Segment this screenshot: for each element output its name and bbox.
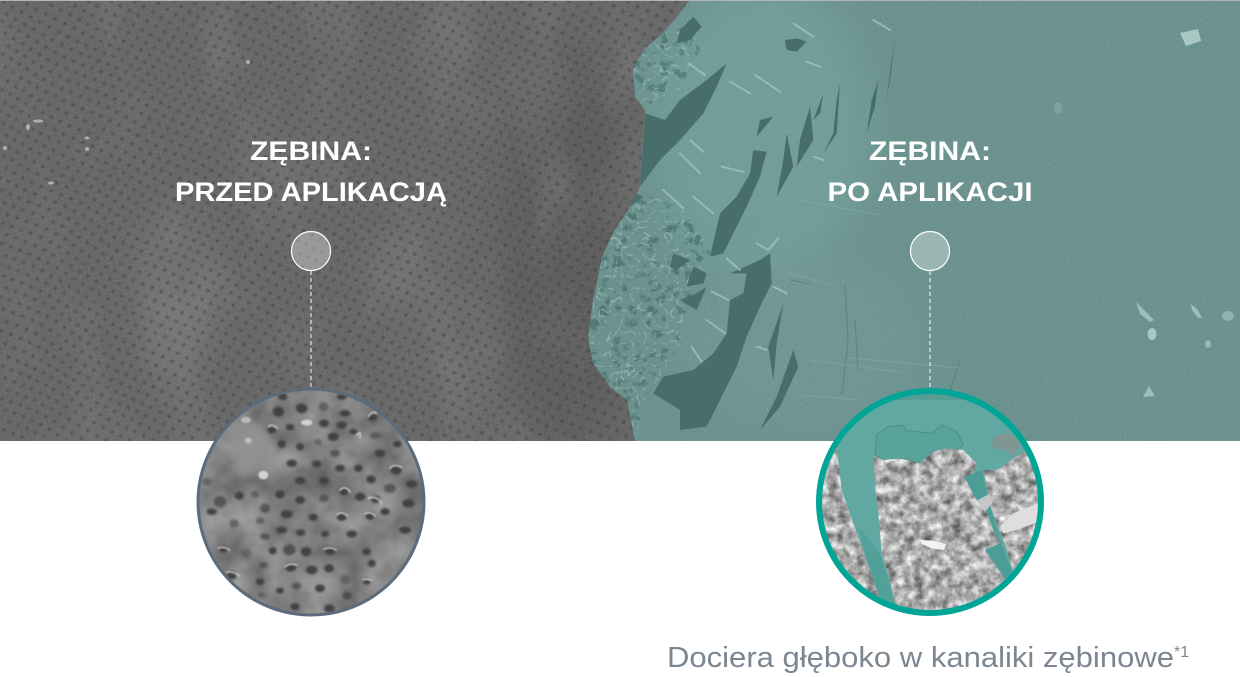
caption: Dociera głęboko w kanaliki zębinowe: [667, 642, 1174, 674]
marker: before application pin: [292, 232, 330, 390]
teal channels: [965, 470, 1013, 578]
light ridges on the fracture: [663, 20, 890, 362]
heading: before application: ZĘBINA:: [250, 136, 372, 166]
heading: after application line two: PO APLIKACJI: [828, 177, 1032, 207]
upper mesh: [633, 27, 700, 104]
photo: treated dentin tinted teal: [580, 0, 1240, 441]
panel: dentin photo before and after: [0, 0, 1240, 450]
top edge highlight: [0, 0, 1240, 1]
caption footnote marker: *1: [1174, 644, 1189, 661]
faint surface cracks: [790, 280, 960, 395]
marker: after application pin: [910, 232, 950, 390]
dark teal gaps in the fracture: [630, 17, 895, 430]
upper right blob: [991, 433, 1022, 457]
bright specks: [1054, 29, 1234, 397]
heading: before application line two: PRZED APLIKACJĄ: [175, 177, 447, 207]
darker top band: [896, 394, 964, 400]
photo: untreated dentin with open tubules: [0, 0, 720, 450]
inset: magnified open tubules: [195, 385, 427, 617]
inset: magnified sealed tubules: [813, 390, 1047, 617]
bright flakes: [920, 540, 946, 550]
broken enamel mesh: [588, 196, 710, 436]
mottled dentin surface: [822, 448, 1038, 610]
heading: after application: ZĘBINA:: [869, 136, 991, 166]
darker teal inner pockets: [875, 425, 963, 463]
